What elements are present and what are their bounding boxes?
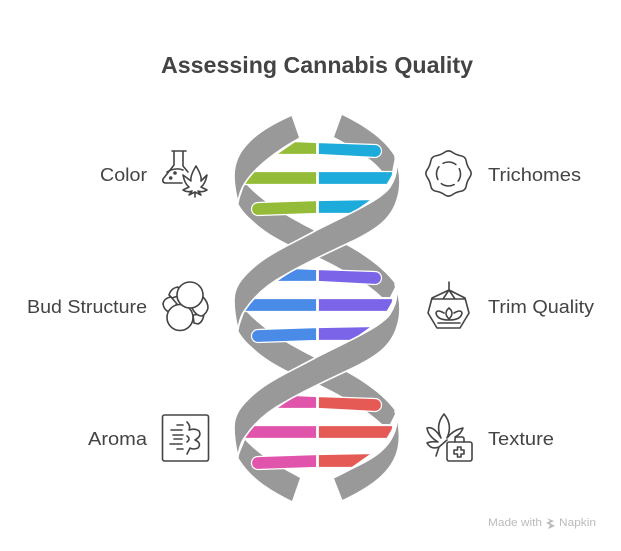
label: Color: Color (100, 165, 147, 185)
icon: trichomes (426, 151, 471, 196)
title: Assessing Cannabis Quality (161, 52, 473, 78)
watermark: Napkin (559, 517, 596, 529)
label: Texture: Texture (488, 429, 554, 449)
front strands (234, 115, 400, 501)
watermark: Made with (488, 517, 542, 529)
icon: aroma box (162, 415, 208, 461)
back strands (238, 115, 396, 501)
icon: napkin logo (546, 518, 555, 529)
rungs: green and blue (243, 142, 393, 216)
DNA helix (234, 115, 400, 501)
icon: trim lantern (428, 282, 469, 328)
rungs: blue and purple (243, 268, 393, 342)
rungs: pink and red (243, 396, 393, 470)
icon: bud clusters (163, 282, 208, 330)
icon: leaf and kit (427, 414, 472, 461)
watermark (488, 517, 596, 529)
label: Trichomes: Trichomes (488, 165, 581, 185)
icon: flask and leaf (163, 151, 207, 197)
label: Trim Quality: Trim Quality (488, 297, 594, 317)
label: Aroma: Aroma (88, 429, 148, 449)
label: Bud Structure: Bud Structure (27, 297, 147, 317)
